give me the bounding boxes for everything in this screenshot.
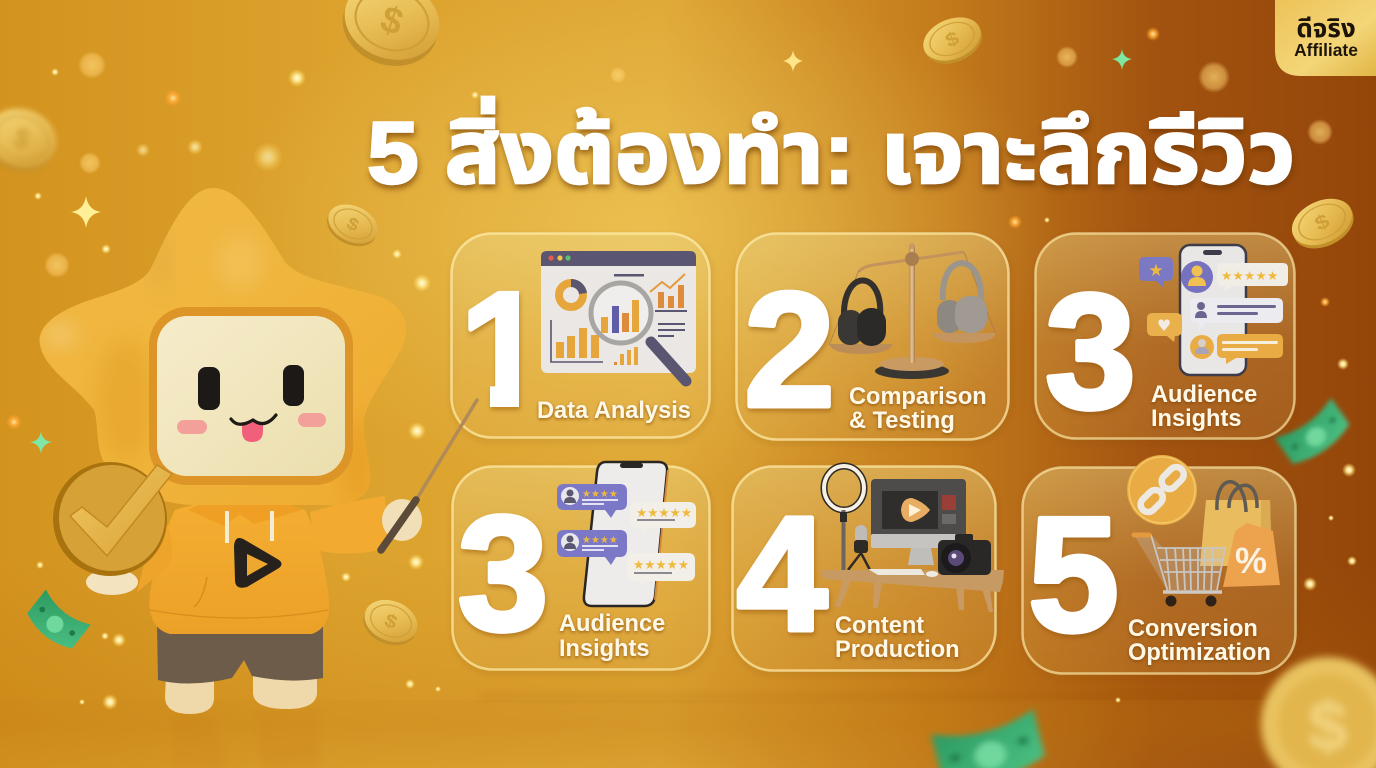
eyes [198, 365, 304, 410]
panel: 4 content production [732, 466, 1004, 670]
star hood head [40, 188, 406, 506]
brand badge [1275, 0, 1376, 76]
panel: 3 audience insights top [1036, 234, 1294, 442]
panel: 1 data analysis [452, 234, 710, 440]
coin: blurred left [0, 99, 65, 181]
bill: right [1275, 398, 1353, 470]
coin: blurred bottom right [1261, 657, 1376, 768]
left hand [86, 569, 138, 595]
cheeks [177, 413, 326, 434]
number 4: 4 [737, 482, 827, 665]
label: Comparison [849, 384, 987, 410]
icon: tilted phone with reviews: ★★★★★ [633, 557, 689, 572]
icon: phone with review bubbles [1139, 245, 1288, 375]
label: Audience [1151, 382, 1257, 408]
coin: top centre-right [917, 9, 988, 72]
label: Content [835, 613, 924, 639]
icon: dashboard with magnifier [541, 251, 696, 381]
icon: tilted phone with reviews: ★★★★★ [636, 505, 692, 520]
number 3: 3 [458, 482, 548, 664]
icon: link coin cart and shopping bags [1127, 455, 1280, 606]
pointer stick [416, 400, 477, 500]
sparkles [30, 49, 1132, 454]
label line 2: Optimization [1128, 640, 1271, 666]
hoodie [149, 496, 329, 634]
icon: phone with review bubbles: ★★★★★ [1221, 268, 1279, 283]
right hand [382, 499, 422, 541]
coin: blurred bottom right: $ [1309, 687, 1347, 765]
icon: tilted phone with reviews [557, 462, 696, 606]
label: Data Analysis [537, 398, 691, 424]
tongue [242, 422, 263, 442]
right arm [310, 496, 388, 554]
title: 5 สิ่งต้องทำ: เจาะลึกรีวิว [367, 97, 1295, 202]
coin: beside mascot star [321, 197, 384, 254]
icon: tilted phone with reviews: ★★★★ [582, 535, 618, 546]
pointer handle [381, 500, 416, 550]
bill: lower left [23, 589, 91, 654]
icon: phone with review bubbles: ★ [1148, 261, 1164, 281]
bill: bottom [931, 709, 1047, 768]
panel: 5 conversion optimization [1022, 455, 1296, 674]
icon: tilted phone with reviews: ★★★★ [582, 489, 618, 500]
mouth [231, 415, 276, 424]
coin: top centre-left [332, 0, 450, 78]
brand badge: Affiliate [1294, 40, 1358, 60]
icon: play logo on hoodie [234, 538, 282, 588]
label line 2: Insights [559, 636, 649, 662]
cash bills [23, 398, 1353, 768]
label line 2: Production [835, 637, 960, 663]
panel: 3 audience insights bottom [452, 462, 710, 670]
number 1: 1 [460, 258, 550, 440]
floor reflection [170, 710, 320, 768]
number 3: 3 [1045, 260, 1136, 442]
icon: link coin cart and shopping bags: % [1235, 540, 1267, 581]
brand badge: ดีจริง [1296, 13, 1356, 43]
coin: beside mascot legs [357, 592, 424, 653]
panel: 2 comparison and testing [736, 234, 1008, 441]
label: Audience [559, 611, 665, 637]
mascot: star character [40, 188, 477, 768]
icon: balance scale with headphones [829, 243, 996, 379]
label: Conversion [1128, 616, 1258, 642]
legs [165, 675, 317, 714]
icon: desk with ring light monitor and camera [821, 466, 1004, 612]
icon: phone with review bubbles: ♥ [1157, 316, 1171, 335]
shorts [157, 625, 323, 684]
left sleeve [137, 520, 172, 592]
hood inner rim [149, 307, 353, 485]
label line 2: Insights [1151, 406, 1241, 432]
gold check coin [53, 462, 172, 576]
coin: right [1284, 190, 1361, 258]
face [157, 316, 345, 476]
number 5: 5 [1028, 482, 1119, 666]
number 2: 2 [744, 258, 835, 441]
label line 2: & Testing [849, 408, 955, 434]
